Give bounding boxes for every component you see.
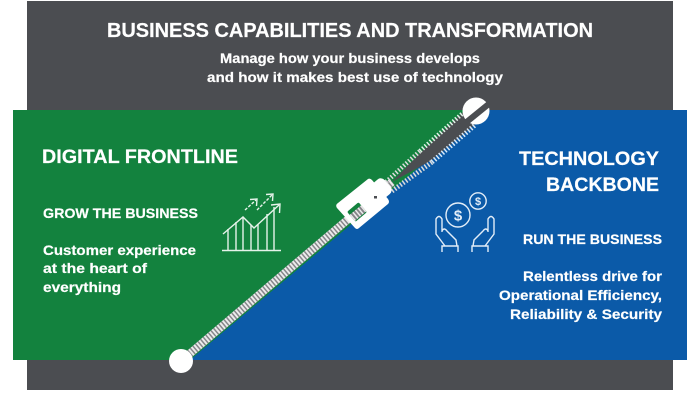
text: customer experience: at the heart of: [43, 260, 147, 276]
text: customer experience: Customer experience: [43, 242, 196, 258]
text: relentless drive: Reliability & Security: [510, 306, 662, 322]
heading: technology backbone: BACKBONE: [546, 175, 659, 196]
panel: technology backbone: [190, 110, 687, 360]
text: relentless drive: Operational Efficiency,: [499, 287, 662, 303]
zipper: top stop: [458, 98, 490, 129]
zipper: closed teeth: [187, 182, 392, 356]
subtitle: [207, 50, 503, 85]
icon: hands and coins: [436, 193, 494, 252]
icon: hands and coins: $: [475, 196, 481, 208]
title: BUSINESS CAPABILITIES AND TRANSFORMATION: [107, 20, 593, 42]
subtitle: and how it makes best use of technology: [207, 69, 503, 85]
subtitle: Manage how your business develops: [220, 50, 480, 66]
text: customer experience: everything: [43, 279, 121, 295]
zipper: blue side teeth: [392, 125, 475, 191]
text: relentless drive: [499, 268, 663, 322]
zipper: open gap: [392, 112, 478, 182]
text: customer experience: [43, 242, 196, 295]
panel: digital frontline: [13, 110, 687, 360]
heading: technology backbone: [519, 149, 659, 196]
subheading: run the business: RUN THE BUSINESS: [523, 231, 662, 247]
zipper: bottom stop: [169, 349, 193, 373]
icon: growth chart: [222, 194, 281, 250]
heading: technology backbone: TECHNOLOGY: [519, 149, 659, 170]
zipper: [169, 98, 490, 373]
heading: digital frontline: DIGITAL FRONTLINE: [42, 147, 238, 168]
subheading: grow the business: GROW THE BUSINESS: [43, 205, 198, 221]
icon: hands and coins: $: [454, 208, 463, 224]
text: relentless drive: Relentless drive for: [523, 268, 663, 284]
zipper: green side teeth: [386, 113, 463, 182]
zipper: slider: [336, 176, 394, 229]
